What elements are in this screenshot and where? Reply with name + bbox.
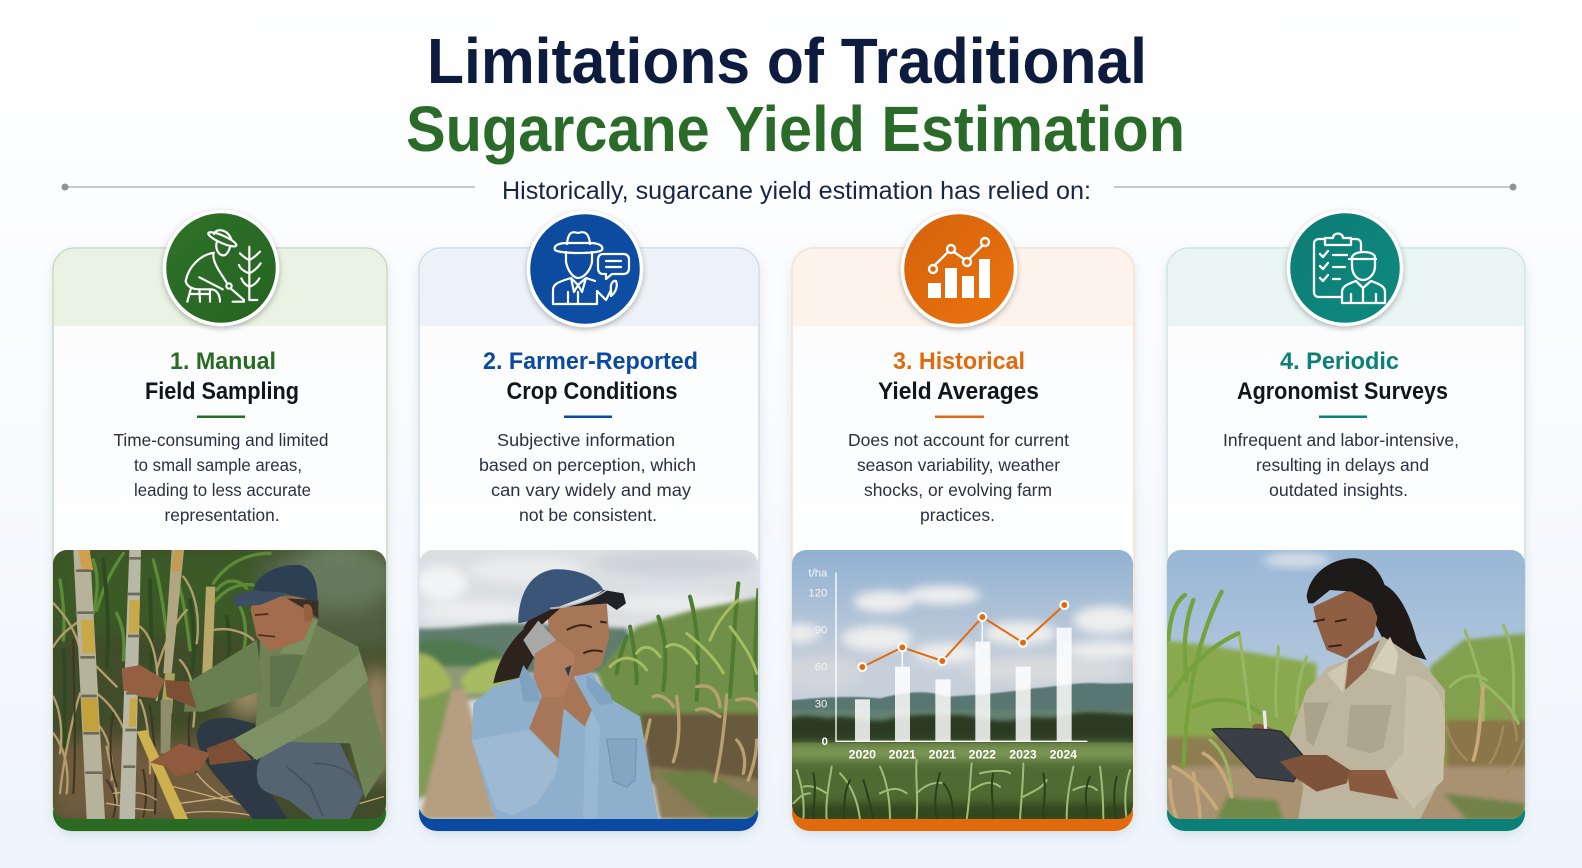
card background 3 [792, 248, 1134, 831]
description 3: shocks, or evolving farm [864, 480, 1052, 500]
header tint 4 [1168, 249, 1524, 326]
description 3: season variability, weather [857, 455, 1060, 475]
heading 2 [483, 348, 698, 405]
y axis labels: 90 [815, 625, 827, 637]
x axis labels [849, 748, 1077, 762]
y axis labels: 120 [808, 588, 827, 600]
icon: farmer tending a cane plant [164, 212, 278, 324]
subtitle with divider lines [62, 177, 1516, 205]
heading 3: Yield Averages [878, 378, 1039, 405]
description 1: Time-consuming and limited [114, 430, 328, 450]
description 3: Does not account for current [848, 430, 1069, 450]
x axis labels: 2022 [969, 748, 996, 762]
heading rule 1 [197, 416, 245, 418]
icon: farmer with speech bubble [528, 212, 642, 326]
icon: clipboard and surveyor [1288, 212, 1402, 324]
x axis labels: 2023 [1009, 748, 1037, 762]
header tint 2 [420, 249, 758, 326]
icon: bar chart with trend [902, 212, 1016, 326]
chart: yield bars and trend line [808, 568, 1087, 762]
heading 1: 1. Manual [170, 348, 276, 375]
heading rule 2 [564, 416, 612, 418]
card background 1 [53, 248, 387, 831]
stalks [73, 550, 105, 819]
photo: woman on the phone in a field track [417, 547, 763, 823]
description 2: Subjective information [497, 430, 675, 450]
header tint 3 [793, 249, 1133, 326]
title: Sugarcane Yield Estimation [406, 93, 1185, 165]
card background 2 [419, 248, 759, 831]
header tint 1 [54, 249, 386, 326]
man [197, 718, 288, 819]
description 2: based on perception, which [479, 455, 696, 475]
photo: cane field with yield chart [780, 547, 1147, 823]
accent band 3 [792, 795, 1133, 831]
description 1: representation. [164, 505, 280, 525]
heading 1 [145, 348, 299, 405]
description 2 [479, 430, 696, 525]
axes [836, 572, 1087, 741]
subtitle with divider lines: Historically, sugarcane yield estimation has relied on: [502, 177, 1091, 205]
title: Limitations of Traditional [427, 25, 1147, 97]
y axis labels: 30 [815, 699, 827, 711]
panel: 3. Historical Yield Averages [780, 212, 1147, 831]
trend line [862, 605, 1064, 667]
heading 3: 3. Historical [893, 348, 1025, 375]
description 3: practices. [920, 505, 995, 525]
heading 4: Agronomist Surveys [1237, 378, 1448, 405]
description 3 [848, 430, 1069, 525]
description 4 [1223, 430, 1459, 500]
description 1: leading to less accurate [134, 480, 311, 500]
accent band 1 [53, 795, 386, 831]
x axis labels: 2020 [849, 748, 876, 762]
accent band 4 [1167, 795, 1525, 831]
heading 4: 4. Periodic [1280, 348, 1399, 375]
description 2: not be consistent. [519, 505, 657, 525]
x axis labels: 2024 [1050, 748, 1077, 762]
y axis labels: t/ha [808, 568, 828, 580]
heading 3 [878, 348, 1039, 405]
description 4: resulting in delays and [1256, 455, 1429, 475]
photo: agronomist with tablet [1163, 547, 1530, 823]
card background 4 [1167, 248, 1525, 831]
panel: 4. Periodic Agronomist Surveys [1163, 212, 1530, 831]
accent band 2 [419, 795, 758, 831]
heading 4 [1237, 348, 1448, 405]
description 1 [114, 430, 328, 525]
description 1: to small sample areas, [134, 455, 302, 475]
heading rule 4 [1319, 416, 1367, 418]
description 4: outdated insights. [1269, 480, 1408, 500]
heading 2: Crop Conditions [506, 378, 678, 405]
heading 1: Field Sampling [145, 378, 299, 405]
y axis labels: 60 [815, 662, 827, 674]
woman [1373, 583, 1427, 660]
panel: 2. Farmer-Reported Crop Conditions [417, 212, 763, 831]
title [406, 25, 1185, 165]
heading 2: 2. Farmer-Reported [483, 348, 698, 375]
woman [493, 629, 534, 684]
y axis labels: 0 [822, 736, 828, 748]
x axis labels: 2021 [929, 748, 956, 762]
heading rule 3 [935, 416, 984, 418]
photo: farmer inspecting sugarcane stalks [50, 543, 397, 823]
description 4: Infrequent and labor-intensive, [1223, 430, 1459, 450]
description 2: can vary widely and may [491, 480, 691, 500]
panel: 1. Manual Field Sampling [50, 212, 397, 831]
x axis labels: 2021 [889, 748, 916, 762]
bars [855, 628, 1072, 741]
y axis labels [808, 568, 828, 748]
